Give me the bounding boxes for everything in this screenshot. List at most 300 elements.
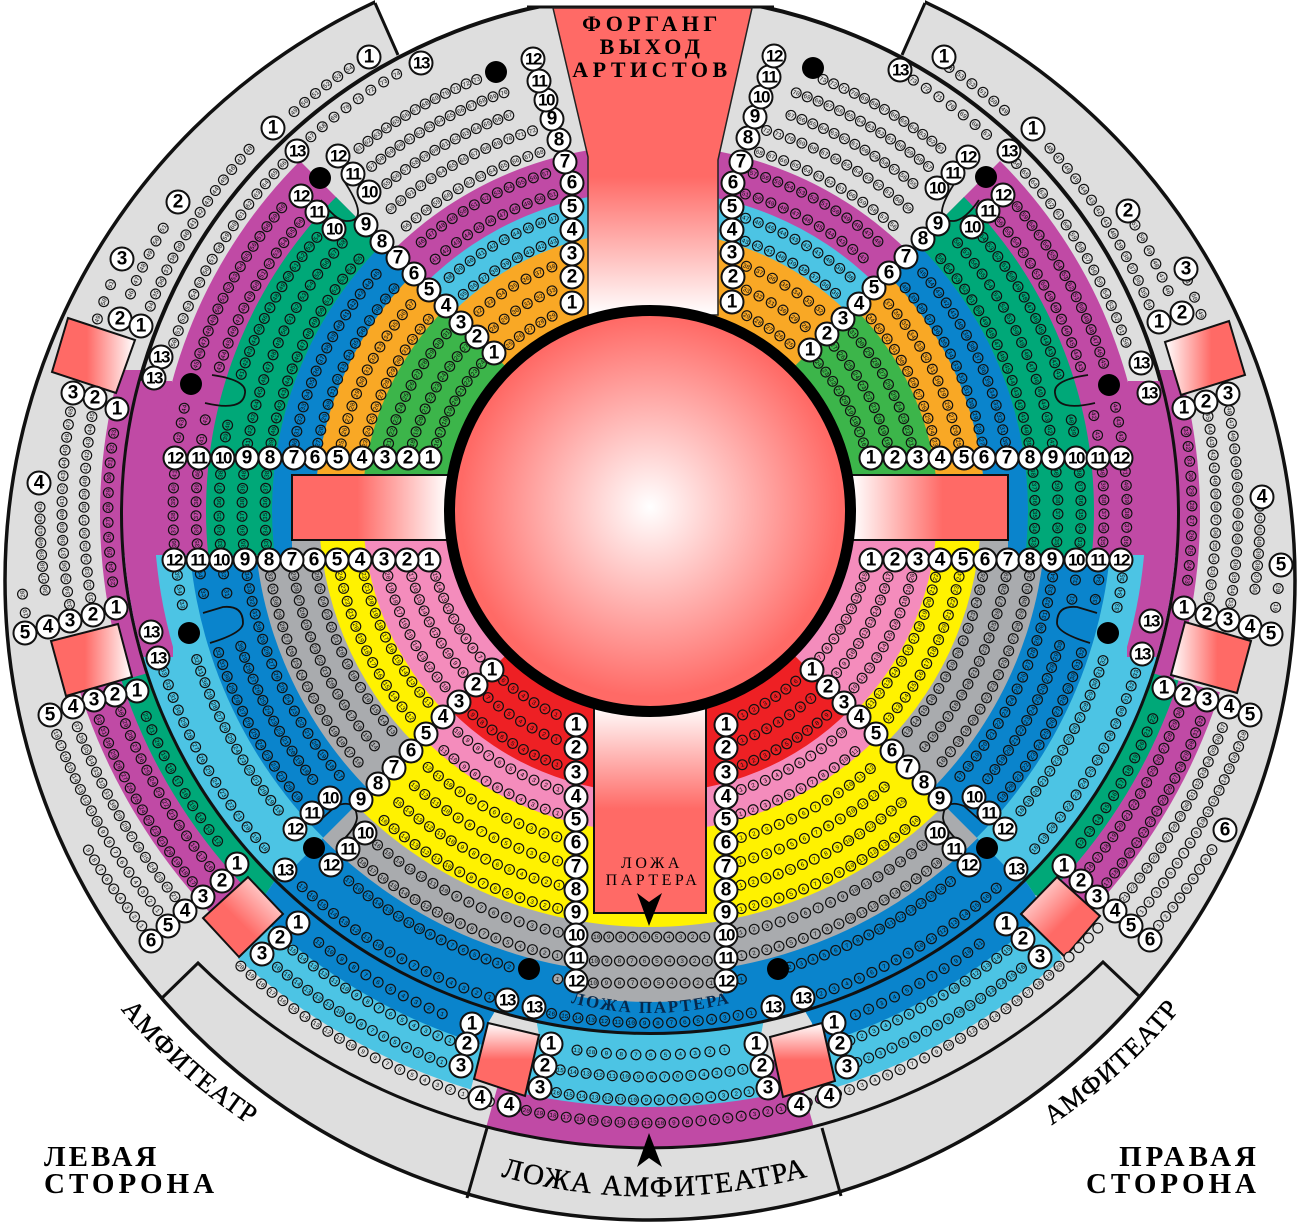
top cut-out above the amphitheatre wings <box>375 0 925 55</box>
seats: upper-right sector: 37 36 35 34 33 32 31 30 29 28 27 26 25 <box>853 299 995 450</box>
row number labels: 1 <box>1179 598 1190 618</box>
seats: lower-right sector: 11 12 13 14 15 16 17 18 19 20 21 22 <box>838 570 968 708</box>
row number labels: 13 <box>1001 142 1018 160</box>
row number labels: 2 <box>472 326 482 348</box>
seats: top wedge, right: 43 42 41 40 39 38 37 36 35 <box>742 238 840 296</box>
row number labels: 10 <box>213 550 230 570</box>
seats: top wedge, left: 35 36 37 38 39 40 41 42 43 <box>460 239 557 298</box>
seats: bottom wedge, left: 18 17 16 15 14 13 12 11 10 9 8 7 6 5 4 3 2 1 <box>358 817 563 1001</box>
row number labels: 2 <box>822 324 832 344</box>
row number labels: 5 <box>163 916 174 936</box>
seats: upper-left sector: 42 43 44 <box>176 405 187 442</box>
black column dots <box>178 57 1120 980</box>
seats: top wedge, left: 28 29 30 31 32 33 <box>490 288 556 332</box>
row number labels: 4 <box>43 616 54 638</box>
row number labels: 5 <box>567 196 578 218</box>
row number labels: 11 <box>191 448 208 468</box>
row number labels: 10 <box>966 788 983 806</box>
row number labels: 12 <box>766 46 783 66</box>
row number labels: 6 <box>309 550 319 570</box>
seats: amphitheatre lower left: 22 21 20 19 18 17 16 15 14 13 12 <box>142 704 223 854</box>
seats: bottom centre rows: 16 15 14 13 12 11 10 9 8 7 6 5 4 3 2 1 <box>547 969 755 1057</box>
row number labels: 2 <box>571 738 581 758</box>
row number labels: 10 <box>1068 550 1085 570</box>
seats: amphitheatre upper left: 33 34 35 36 37 38 39 40 41 42 43 44 45 46 47 48 <box>34 406 107 609</box>
seats: upper-right sector: 40 39 38 37 36 35 <box>1045 468 1067 547</box>
seats: amphitheatre lower left: 30 29 28 27 26 25 24 23 22 21 20 19 18 17 16 <box>116 696 216 883</box>
heading: left side <box>44 1141 218 1200</box>
passage: left <box>292 475 448 540</box>
seats: row 13 upper: 74 73 72 71 70 69 68 67 <box>889 68 998 141</box>
row number labels: 2 <box>115 308 125 330</box>
seats: amphitheatre centre: 15 14 13 12 11 10 9 8 7 6 5 4 3 2 1 <box>556 1035 746 1104</box>
row number labels: 11 <box>981 804 998 822</box>
top edge mask <box>500 0 800 6</box>
row number labels: 6 <box>721 832 731 854</box>
label: amphitheatre left: АМФИТЕАТР <box>116 994 264 1130</box>
seats: lower-left sector: 17 16 15 14 13 12 11 10 9 8 <box>407 565 468 683</box>
row number labels: 2 <box>1123 200 1133 222</box>
seats: bottom wedge, left: 10 9 8 7 6 5 4 3 2 1 <box>453 709 563 812</box>
row number labels: 8 <box>373 774 383 794</box>
row number labels: 3 <box>913 550 923 570</box>
seats: lower-right sector: 14 15 16 17 18 19 20 21 22 23 24 25 26 27 28 29 <box>880 569 1050 752</box>
row number labels: 4 <box>854 294 865 314</box>
seats: lower-left sector: 20 19 18 17 16 15 14 13 12 11 10 <box>384 564 451 700</box>
heading: right side <box>1086 1141 1260 1200</box>
row number labels: 3 <box>379 550 389 570</box>
seats: amphitheatre lower right: 1 2 3 4 5 6 7 8 9 <box>1149 845 1222 929</box>
row number labels: 6 <box>979 448 989 468</box>
row number labels: 13 <box>143 622 160 642</box>
row number labels: 5 <box>421 724 432 744</box>
row number labels: 13 <box>892 60 909 80</box>
seats: upper-right sector: 31 30 29 28 27 26 25 24 23 22 21 <box>825 328 940 450</box>
row number labels: 6 <box>887 740 897 762</box>
seats: amphitheatre lower right: 21 22 23 24 25 26 27 28 29 30 31 32 33 34 35 36 37 <box>1094 721 1253 903</box>
heading: right side: СТОРОНА <box>1086 1168 1260 1200</box>
seats: lower-right sector: 33 34 <box>1090 575 1104 604</box>
row number labels: 1 <box>727 292 738 312</box>
seats: amphitheatre upper left: 49 50 51 <box>93 279 116 324</box>
seats: amphitheatre upper left: 23 24 25 26 27 28 29 30 31 32 33 <box>88 428 139 586</box>
seats: lower-left sector: 29 28 27 26 25 24 23 22 21 20 19 18 17 16 15 14 <box>290 563 380 760</box>
row number labels: 2 <box>403 448 413 468</box>
row number labels: 12 <box>323 856 340 874</box>
seats: amphitheatre centre: 11 10 9 8 7 6 5 4 3 2 1 <box>573 1025 728 1075</box>
heading: left side: ЛЕВАЯ <box>44 1141 159 1173</box>
parterre base <box>122 0 1178 1033</box>
amphitheatre wing end lines <box>375 3 925 55</box>
row number labels: 7 <box>560 152 570 172</box>
row number labels: 2 <box>110 684 120 706</box>
arrow: amphitheatre loge <box>637 1133 662 1167</box>
row number labels: 3 <box>456 1056 466 1076</box>
row number labels: 5 <box>20 622 31 644</box>
seats: top wedge, right: 70 69 68 67 66 65 64 63 62 61 60 59 58 57 <box>793 90 932 170</box>
row number labels: 1 <box>136 316 147 336</box>
row number labels: 12 <box>167 448 184 468</box>
seats: lower-right sector: 17 18 19 20 21 22 23 24 25 26 27 28 29 30 <box>960 639 1087 784</box>
row number labels: 7 <box>289 448 299 468</box>
seats: amphitheatre upper left: 36 37 38 39 40 41 42 43 <box>30 502 56 594</box>
row number labels: 9 <box>356 790 366 810</box>
row number labels: 1 <box>489 342 500 364</box>
row number labels: 9 <box>240 550 250 570</box>
row number labels: 6 <box>728 172 738 194</box>
seats: upper-left sector: 36 37 38 39 40 41 <box>165 469 184 548</box>
row number labels: 2 <box>1177 302 1187 324</box>
seats: bottom wedge, left: 9 8 7 6 5 4 3 2 1 <box>469 696 562 783</box>
row number labels: 13 <box>795 988 812 1008</box>
seats: amphitheatre lower right: 1 2 3 4 5 6 7 8 9 10 11 12 13 14 15 16 17 18 <box>1111 729 1275 915</box>
row number labels: 10 <box>538 90 555 110</box>
row number labels: 12 <box>330 146 347 166</box>
row number labels: 2 <box>88 604 98 626</box>
row number labels: 3 <box>89 690 99 710</box>
row number labels: 6 <box>146 930 156 952</box>
row number labels: 4 <box>180 900 191 922</box>
seats: top wedge, right: 51 50 49 48 47 46 45 44 43 42 41 <box>742 191 866 262</box>
row number labels: 1 <box>293 912 304 934</box>
row number labels: 12 <box>997 820 1014 838</box>
row number labels: 13 <box>499 990 516 1010</box>
seats: upper-right sector: 40 39 <box>1067 415 1078 436</box>
row number labels: 7 <box>393 248 403 268</box>
row number labels: 6 <box>310 448 320 468</box>
row number labels: 13 <box>1133 354 1150 372</box>
seats: upper-left sector: 27 28 29 30 31 32 33 34 35 36 37 38 39 40 <box>315 286 398 446</box>
row number labels: 2 <box>823 676 833 698</box>
seats: bottom wedge, right: 1 2 3 4 5 6 7 8 9 10 <box>731 727 855 793</box>
seats: upper-right sector: 38 37 36 35 34 33 <box>1069 469 1090 547</box>
row number labels: 7 <box>721 856 731 878</box>
seats: upper-left sector: 35 36 37 38 39 40 <box>188 469 207 548</box>
row number labels: 8 <box>571 880 581 900</box>
row number labels: 7 <box>571 856 581 878</box>
seats: lower-right sector: 7 8 9 10 11 12 13 14 15 <box>799 570 885 661</box>
row number labels: 1 <box>364 46 375 68</box>
seats: upper-right sector: 60 59 58 57 56 55 54 53 52 51 50 49 48 47 46 45 <box>985 201 1136 370</box>
row number labels: 2 <box>728 266 738 288</box>
row number labels: 11 <box>718 948 735 968</box>
row number labels: 7 <box>1002 448 1012 468</box>
row number labels: 1 <box>546 1034 557 1054</box>
row number labels: 10 <box>718 926 735 944</box>
heading: right side: ПРАВАЯ <box>1119 1141 1260 1173</box>
row number labels: 5 <box>869 278 880 298</box>
row number labels: 12 <box>166 550 183 570</box>
row number labels: 1 <box>425 448 436 468</box>
row number labels: 2 <box>890 550 900 570</box>
row number labels: 1 <box>1154 312 1165 332</box>
row number labels: 3 <box>838 308 848 330</box>
seats: upper-right sector: 41 40 39 38 37 36 <box>1115 467 1136 546</box>
row number labels: 11 <box>304 804 321 822</box>
seats: amphitheatre upper left: 46 47 48 49 50 51 <box>126 221 169 301</box>
row number labels: 2 <box>1202 604 1212 626</box>
row number labels: 3 <box>763 1078 773 1098</box>
seats: bottom wedge, right: 1 2 3 4 5 6 <box>735 676 804 719</box>
seats: top wedge, right: 73 72 71 70 69 68 67 66 65 64 63 62 61 <box>820 76 944 152</box>
row number labels: 5 <box>424 280 435 300</box>
row number labels: 6 <box>1220 820 1230 840</box>
seats: upper-left sector: 23 24 25 26 27 28 29 30 31 32 33 34 <box>362 316 432 446</box>
seats: bottom wedge, left: 16 15 14 13 12 11 10 9 8 7 6 5 4 3 2 1 <box>379 779 563 950</box>
passage: forgang artists exit <box>553 8 752 315</box>
row number labels: 10 <box>964 218 981 236</box>
seats: bottom wedge, left: 17 16 15 14 13 12 11 10 9 8 7 6 5 4 3 2 <box>344 848 514 999</box>
row number labels: 5 <box>1266 624 1277 644</box>
row number labels: 3 <box>198 886 208 908</box>
seats: amphitheatre lower left: 15 14 13 12 11 10 9 8 7 6 5 4 3 2 1 <box>288 921 455 1068</box>
row number labels: 6 <box>980 550 990 570</box>
heading: forgang artists exit <box>572 11 732 82</box>
label: parterre loge in box <box>606 855 700 889</box>
seats: upper-right sector: 56 55 54 53 52 51 50 49 48 47 46 45 44 43 <box>970 217 1110 374</box>
label: amphitheatre loge: ЛОЖА АМФИТЕАТРА <box>499 1152 811 1204</box>
seats: amphitheatre lower right: 16 17 18 19 20 21 22 23 24 25 26 27 28 29 30 <box>1061 706 1207 873</box>
seats: top wedge, right: 72 71 70 69 68 67 66 65 64 63 62 61 60 59 <box>764 128 912 211</box>
seats: top wedge, right: 68 67 66 65 64 63 62 61 60 59 58 57 56 <box>756 150 896 229</box>
row number labels: 8 <box>721 880 731 900</box>
row number labels: 11 <box>531 72 548 90</box>
row number labels: 3 <box>571 762 581 784</box>
seats: upper-left sector: 33 34 35 36 37 38 <box>262 471 269 548</box>
row number labels: 4 <box>1257 486 1268 508</box>
seats: bottom wedge, right: 1 2 3 4 5 6 7 8 9 10 11 12 13 <box>728 781 899 865</box>
row number labels: 4 <box>441 296 452 316</box>
seats: upper-left sector: 18 19 20 21 22 23 24 25 26 27 <box>410 343 468 447</box>
row number labels: 1 <box>1179 398 1190 418</box>
box: parterre loge column <box>594 705 706 913</box>
row number labels: 10 <box>326 220 343 238</box>
seats: bottom centre rows: 10 9 8 7 6 5 4 3 2 1 <box>590 980 713 986</box>
row number labels: 2 <box>471 674 481 696</box>
seats: upper-right sector: 44 43 42 <box>1110 403 1127 442</box>
row number labels: 1 <box>1059 856 1070 876</box>
row number labels: 8 <box>554 130 564 150</box>
seats: bottom wedge, left: 11 10 9 8 7 6 5 4 3 2 1 <box>439 724 563 839</box>
label: amphitheatre right: АМФИТЕАТР <box>1038 993 1185 1130</box>
row number labels: 11 <box>309 202 326 222</box>
row number labels: 2 <box>462 1034 472 1054</box>
row number labels: 4 <box>935 448 946 468</box>
seats: lower-left sector: 33 32 31 30 29 28 27 26 25 24 23 22 21 20 19 18 <box>159 654 270 866</box>
seats: top wedge, right: 57 56 55 54 53 52 51 50 49 48 47 46 <box>750 170 882 244</box>
row number labels: 12 <box>995 186 1012 204</box>
row number labels: 11 <box>1090 448 1107 468</box>
seats: amphitheatre upper right: 33 32 31 30 29 28 27 26 25 24 23 <box>1160 428 1213 586</box>
seats: bottom wedge, right: 1 2 3 4 5 6 7 <box>734 694 820 744</box>
row number labels: 4 <box>475 1088 486 1108</box>
row number labels: 6 <box>884 262 894 284</box>
row number labels: 1 <box>112 398 123 420</box>
row number labels: 9 <box>721 902 731 924</box>
seats: lower-right sector: 31 32 <box>1067 575 1080 604</box>
row number labels: 2 <box>1076 870 1086 892</box>
seats: bottom wedge, right: 1 2 3 4 5 6 7 8 9 10 11 12 13 14 15 16 17 18 <box>729 857 953 959</box>
row number labels: 2 <box>1018 928 1028 950</box>
row number labels: 13 <box>1008 860 1025 878</box>
seats: amphitheatre upper left: 31 32 33 34 35 36 37 38 39 40 41 42 43 44 45 <box>58 411 126 602</box>
amphitheatre lower section lines <box>162 962 1140 1198</box>
seats: upper-left sector: 33 34 35 36 37 38 <box>210 469 231 548</box>
row number labels: 1 <box>866 550 877 570</box>
seats: bottom wedge, right: 1 2 3 4 5 6 7 8 9 10 11 12 13 14 15 16 <box>728 840 938 936</box>
seats: bottom wedge, right: 1 2 3 4 5 6 7 8 9 10 11 12 13 14 15 16 17 <box>791 882 1017 1002</box>
seats: bottom wedge, left: 13 12 11 10 9 8 7 6 5 4 3 2 1 <box>409 752 563 894</box>
row number labels: 10 <box>929 824 946 842</box>
row number labels: 12 <box>1113 448 1130 468</box>
row number labels: 4 <box>824 1086 835 1106</box>
row number labels: 12 <box>568 972 585 990</box>
seats: top wedge, left: 38 39 40 41 42 43 44 45 46 47 <box>446 216 556 281</box>
seats: lower-left sector: 34 33 32 31 30 29 28 27 26 25 24 23 22 21 20 19 18 17 <box>243 562 345 790</box>
row number labels: 1 <box>1159 678 1170 698</box>
row number labels: 11 <box>345 164 362 184</box>
row number labels: 1 <box>1001 914 1012 934</box>
row number labels: 1 <box>232 854 243 874</box>
seats: bottom wedge, right: 2 3 4 5 6 7 8 9 10 11 12 13 14 15 16 17 <box>776 876 967 971</box>
row number labels: 4 <box>794 1094 805 1116</box>
row number labels: 1 <box>111 598 122 618</box>
seats: lower-right sector: 13 14 15 16 17 18 19 20 21 22 23 24 25 26 <box>867 570 1023 737</box>
seats: amphitheatre lower left: 18 17 16 15 14 13 12 11 10 9 8 7 6 5 4 3 2 1 <box>52 718 163 926</box>
seats: amphitheatre lower right: 1 2 3 4 5 6 7 8 9 10 11 12 13 14 15 16 <box>842 962 1038 1066</box>
seats: top wedge, right: 33 32 31 30 29 28 <box>743 287 809 330</box>
row number labels: 3 <box>380 448 390 468</box>
seats: lower-left sector: 22 21 20 19 18 17 16 15 14 13 12 11 <box>360 564 434 716</box>
row number labels: 3 <box>68 382 78 404</box>
heading: left side: СТОРОНА <box>44 1168 218 1200</box>
row number labels: 13 <box>146 368 163 388</box>
row number labels: 3 <box>721 762 731 784</box>
row number labels: 11 <box>1090 550 1107 570</box>
row number labels: 13 <box>1134 644 1151 664</box>
seats: upper-left sector: 30 31 32 33 34 35 36 37 38 39 40 41 42 43 44 45 <box>292 270 380 446</box>
row number labels: 10 <box>929 178 946 198</box>
heading: forgang artists exit: АРТИСТОВ <box>572 57 732 82</box>
row number labels: 11 <box>980 202 997 220</box>
seats: upper-left sector: 41 42 <box>199 416 208 443</box>
row number labels: 7 <box>389 758 399 778</box>
row number labels: 3 <box>454 692 464 712</box>
row number labels: 7 <box>287 550 297 570</box>
row number labels: 7 <box>1003 550 1013 570</box>
row number labels: 12 <box>961 856 978 874</box>
heading: forgang artists exit: ФОРГАНГ <box>582 11 722 36</box>
seats: upper-right sector: 45 44 43 42 41 40 39 38 37 36 35 34 33 32 31 30 <box>878 268 1050 450</box>
row number labels: 1 <box>567 292 578 314</box>
seats: lower-right sector: 16 17 18 19 20 21 22 23 24 25 26 27 28 29 30 31 32 <box>893 568 1078 767</box>
row number labels: 13 <box>289 142 306 160</box>
seats: top wedge, left: 57 58 59 60 61 62 63 64 65 66 67 68 69 70 <box>368 90 508 170</box>
seats: upper-left sector: 25 26 27 28 29 30 31 32 33 34 35 36 37 <box>338 300 414 446</box>
seats: amphitheatre upper right: 48 47 46 45 44 43 42 41 40 39 38 37 36 35 34 <box>1020 143 1179 312</box>
seats: amphitheatre upper right: 45 44 43 42 41 40 39 38 37 36 35 34 33 32 31 <box>1173 412 1243 603</box>
seats: lower-right sector: 33 34 35 <box>1112 573 1128 612</box>
seats: upper-right sector: 55 54 53 52 51 50 49 48 47 46 45 44 43 42 41 40 39 <box>893 254 1077 450</box>
seats: amphitheatre lower right: 12 13 14 15 16 17 18 19 20 21 22 <box>1059 712 1174 848</box>
seats: bottom wedge, left: 12 11 10 9 8 7 6 5 4 3 2 1 <box>423 737 562 867</box>
row number labels: 7 <box>903 756 913 778</box>
row number labels: 10 <box>1068 448 1085 468</box>
row number labels: 3 <box>1181 258 1191 280</box>
seats: top wedge, right: 38 37 36 35 34 33 32 <box>743 264 824 314</box>
row number labels: 6 <box>571 832 581 854</box>
seats: upper-right sector: 42 41 <box>1089 411 1103 440</box>
row number labels: 7 <box>901 246 911 268</box>
row number labels: 4 <box>567 220 578 240</box>
seats: upper-right sector: 40 39 38 37 36 35 <box>1092 468 1113 547</box>
seats: bottom wedge, right: 1 2 3 4 5 6 7 8 9 <box>733 710 837 769</box>
row number labels: 5 <box>45 704 56 726</box>
seats: top wedge, left: 25 26 27 28 29 <box>506 313 556 348</box>
row number labels: 3 <box>65 610 75 632</box>
row number labels: 13 <box>765 998 782 1016</box>
row number labels: 3 <box>567 244 577 264</box>
row number labels: 5 <box>1245 704 1256 726</box>
row number labels: 2 <box>275 928 285 948</box>
label: parterre loge in box: ЛОЖА <box>621 855 683 872</box>
seats: bottom wedge, left: 17 16 15 14 13 12 11 10 9 8 7 6 5 4 3 2 1 <box>297 846 495 1037</box>
seats: upper-right sector: 34 33 32 31 30 29 28 27 26 25 24 23 <box>839 314 967 450</box>
row number labels: 1 <box>939 46 950 68</box>
seats: amphitheatre upper right: 51 50 49 <box>1181 275 1207 320</box>
row number labels: 3 <box>913 448 923 468</box>
row number labels: 2 <box>721 738 731 758</box>
amphitheatre entrance boxes <box>51 318 1251 1097</box>
row number labels: 8 <box>265 448 275 468</box>
seats: top wedge, left: 61 62 63 64 65 66 67 68 69 70 71 72 73 <box>356 76 480 152</box>
row number labels: 11 <box>568 948 585 968</box>
seats: upper-left sector: 43 44 45 46 47 48 49 50 51 52 53 54 55 56 <box>217 219 303 371</box>
seats: upper-left sector: 45 46 47 48 49 50 51 52 53 54 55 56 57 58 59 60 <box>194 204 285 368</box>
row number labels: 6 <box>1145 930 1155 950</box>
seats: upper-left sector: 16 17 18 19 20 21 22 23 24 <box>434 360 485 447</box>
seats: lower-left sector: 32 31 30 29 28 27 26 25 24 23 22 21 20 19 18 <box>192 645 284 826</box>
seats: lower-right sector: 12 13 14 15 16 17 18 19 20 21 22 23 24 <box>852 569 996 723</box>
row number labels: 2 <box>1181 684 1191 706</box>
row number labels: 13 <box>150 648 167 668</box>
row number labels: 3 <box>727 242 737 264</box>
row number labels: 8 <box>918 228 928 250</box>
row number labels: 2 <box>540 1056 550 1076</box>
row number labels: 12 <box>960 148 977 166</box>
seats: upper-left sector: 21 22 23 24 25 26 27 28 29 30 31 <box>386 330 450 446</box>
passage: right <box>852 475 1008 540</box>
seats: top wedge, right: 47 46 45 44 43 42 41 40 39 38 <box>742 216 854 280</box>
seats: upper-right sector: 54 53 52 51 50 49 48 47 46 45 44 43 42 41 <box>954 232 1087 381</box>
seats: lower-left sector: 32 31 30 29 28 27 26 25 24 23 22 21 20 19 18 17 16 <box>266 563 364 777</box>
seats: upper-left sector: 39 40 <box>222 422 230 440</box>
seats: amphitheatre lower right: 1 2 3 4 5 6 7 8 9 10 11 12 13 14 15 <box>836 944 1023 1045</box>
row number labels: 1 <box>751 1034 762 1054</box>
row number labels: 3 <box>1223 384 1233 404</box>
seats: lower-right sector: 18 19 20 21 22 23 24 25 26 27 28 29 30 31 32 <box>990 654 1134 816</box>
seats: row 13 upper: 67 68 69 70 71 72 73 74 <box>306 60 403 151</box>
seats: amphitheatre upper left: 19 20 <box>18 589 30 617</box>
seats: bottom wedge, right: 1 2 3 4 5 6 7 8 9 10 11 12 13 14 15 <box>728 797 917 889</box>
seats: bottom wedge, right: 1 2 3 4 5 6 7 8 9 10 11 12 <box>730 763 885 841</box>
row number labels: 3 <box>1092 886 1102 908</box>
row number labels: 3 <box>1223 610 1233 630</box>
row number labels: 4 <box>571 786 582 808</box>
row number labels: 6 <box>406 740 416 762</box>
row number labels: 2 <box>1201 392 1211 412</box>
seats: row 13 upper: 66 65 64 63 62 61 60 59 58 57 56 55 54 53 52 51 50 <box>978 158 1165 349</box>
